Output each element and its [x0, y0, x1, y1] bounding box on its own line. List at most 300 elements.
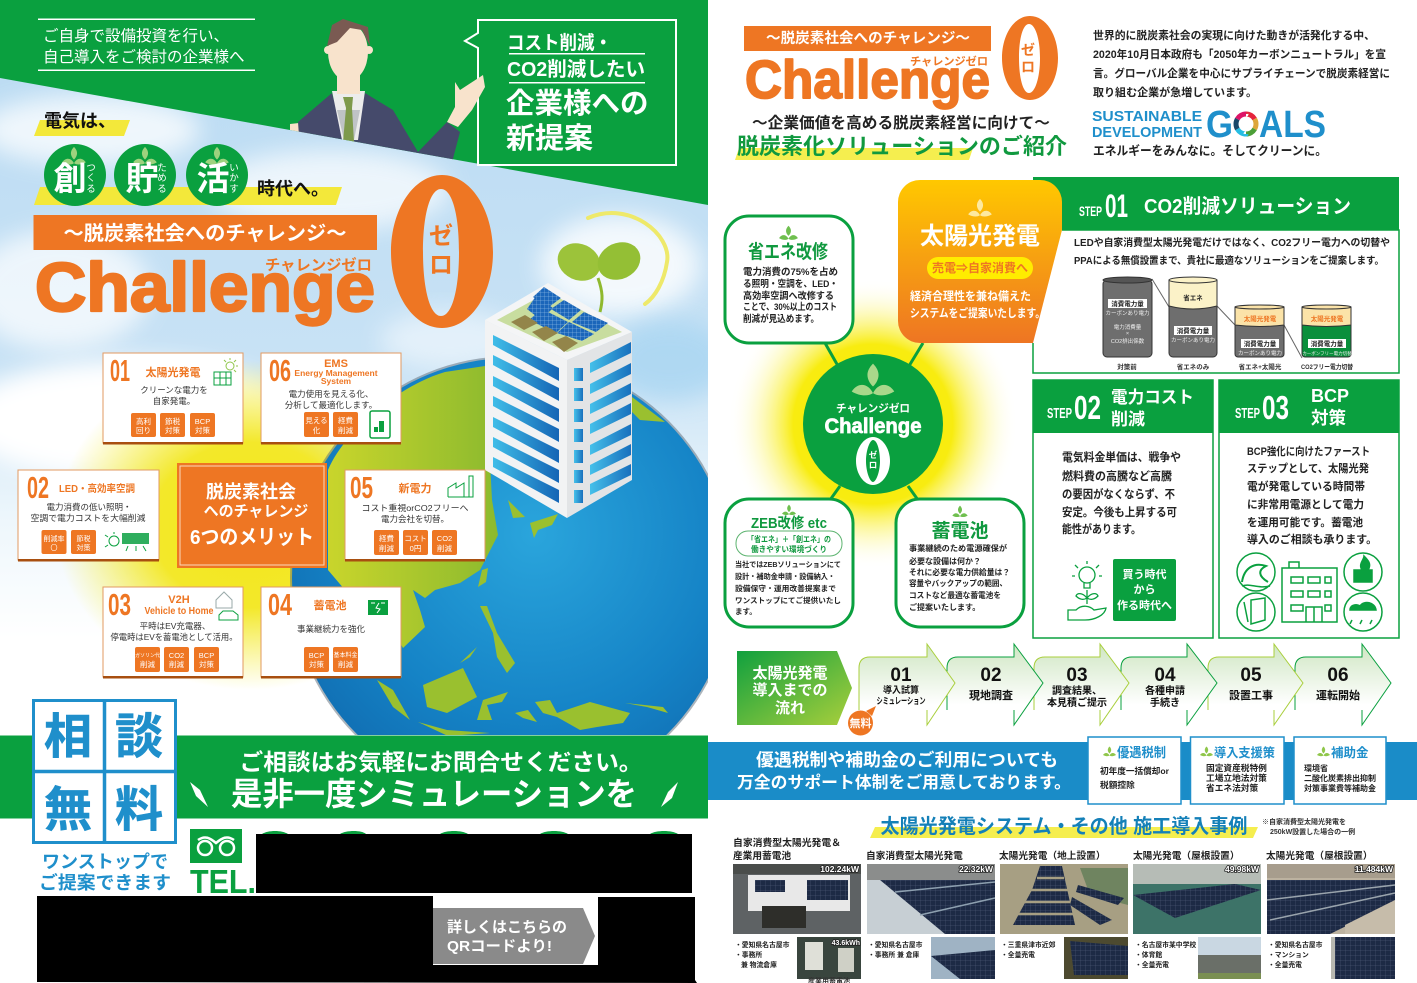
chart: cylinder comparison: 対策前 [1117, 362, 1137, 371]
right page intro paragraph [1093, 28, 1390, 99]
circle: 貯: め [157, 173, 167, 184]
chart: cylinder comparison: 消費電力量 [1244, 339, 1277, 348]
box: 補助金: 環境省 [1304, 763, 1328, 773]
case 3 [999, 849, 1128, 979]
box: 優遇税制 [1088, 737, 1181, 804]
chart: cylinder comparison: 省エネのみ [1177, 362, 1210, 371]
case 2: 自家消費型太陽光発電 [866, 849, 963, 862]
step 01 panel: LEDや自家消費型太陽光発電だけではなく、CO2フリー電力への切替や [1074, 236, 1390, 249]
circle: 活: い [229, 163, 239, 174]
case 1: ・愛知県名古屋市 [735, 940, 790, 949]
merit card 06: 分析して最適化します。 [285, 400, 377, 410]
left page sky background [0, 78, 708, 582]
lower redaction block [37, 896, 697, 983]
big zero [391, 175, 493, 328]
flow step 06: 運転開始 [1316, 688, 1360, 702]
TEL label: TEL. [190, 863, 256, 900]
central circle: Challenge 0: ゼ [869, 450, 878, 460]
central circle: Challenge 0: ロ [869, 460, 877, 470]
flow step 03 [1034, 644, 1129, 725]
yellow band and time text [34, 179, 342, 205]
flow step 04: 04 [1154, 665, 1176, 686]
blue support band: 万全のサポート体制をご用意しております。 [737, 772, 1071, 792]
step 03 panel: 03 [1262, 389, 1289, 426]
chart: cylinder comparison: 太陽光発電 [1244, 314, 1277, 323]
SDGs logo: G [1206, 104, 1233, 146]
box: 補助金 [1294, 737, 1386, 804]
circle: 活: か [229, 173, 239, 184]
merit card 01: 高利 [136, 416, 151, 426]
chart: cylinder comparison: 電力消費量 [1114, 323, 1142, 331]
QR arrow callout: QRコードより! [447, 938, 552, 955]
merit card 01: 太陽光発電 [146, 365, 200, 379]
card: ZEB改修: ワンストップにてご提供いたし [735, 595, 841, 605]
step 02 panel: 買う時代 [1122, 567, 1166, 581]
merit center box [177, 463, 327, 568]
flow step 01: シミュレーション [876, 696, 926, 706]
card: 蓄電池: それに必要な電力供給量は？ [909, 567, 1010, 577]
QR arrow callout: 詳しくはこちらの [447, 919, 567, 936]
connecting lines [825, 343, 923, 500]
building with rooftop solar [485, 283, 632, 518]
headline: 電気は: 電気は、 [44, 110, 116, 131]
merit card 05: CO2 [437, 534, 452, 543]
merit card 06: Energy Management [294, 368, 378, 378]
icon: bulb and hand [1068, 561, 1106, 620]
merit card 06 [261, 353, 401, 444]
circle: 創: 創 [54, 160, 86, 197]
green consultation band: 是非一度シミュレーションを [231, 776, 637, 812]
box: 導入支援策 [1190, 737, 1284, 804]
merit card 02: 節税 [76, 534, 90, 543]
cases note: ※自家消費型太陽光発電を [1262, 817, 1346, 826]
headline: 電気は [34, 110, 130, 136]
chart: cylinder comparison: × [1126, 331, 1129, 337]
merit card 05: 新電力 [398, 481, 432, 495]
green consultation band [0, 736, 708, 818]
merit card 02: 電力消費の低い照明・ [46, 502, 132, 512]
speech bubble: CO2削減したい [507, 57, 645, 81]
merit card 01: 回り [136, 426, 151, 435]
flow step 05 [1208, 644, 1303, 725]
merit card 05: 0円 [410, 544, 421, 553]
box: 優遇税制: 初年度一括償却or [1100, 765, 1170, 776]
chart: cylinder comparison: 省エネ+太陽光 [1239, 362, 1282, 371]
circle: 貯 [114, 144, 176, 206]
merit card 05: 経費 [379, 533, 394, 543]
card: 蓄電池: 蓄電池 [931, 520, 989, 542]
card: ZEB改修: ZEB改修 etc [751, 514, 827, 532]
card: 蓄電池: 必要な設備は何か？ [909, 556, 981, 566]
right page Challenge logotype: Challenge [745, 50, 990, 110]
case 4: ・全量売電 [1135, 960, 1169, 969]
merit card 05 [345, 470, 485, 562]
blue support band: 優遇税制や補助金のご利用についても [756, 749, 1058, 770]
chart: cylinder comparison: 省エネ [1183, 293, 1203, 302]
case 5: ・愛知県名古屋市 [1268, 940, 1323, 949]
merit card 03: V2H [168, 594, 190, 606]
card: 蓄電池: 容量やバックアップの範囲、 [909, 578, 1007, 588]
orange banner [34, 215, 377, 250]
card: 蓄電池: ご提案いたします。 [909, 602, 980, 612]
step 02 panel: 燃料費の高騰など高騰 [1062, 469, 1172, 483]
merit card 06: 削減 [338, 425, 353, 435]
merit card 04: 蓄電池 [314, 598, 346, 612]
chart: cylinder comparison: 消費電力量 [1311, 339, 1344, 348]
box: 補助金: 対策事業費等補助金 [1304, 783, 1376, 793]
right page main heading: 脱炭素化ソリューションのご紹介 [737, 134, 1067, 159]
chart: cylinder comparison: カーボンフリー電力切替 [1302, 350, 1352, 357]
merit card 03: 対策 [199, 659, 214, 669]
box: 補助金: 補助金 [1331, 745, 1369, 760]
SDGs logo: DEVELOPMENT [1092, 124, 1202, 141]
phone number redaction [256, 831, 692, 893]
SDGs logo: ALS [1259, 104, 1326, 146]
flow step 01: 01 [890, 665, 912, 686]
case 1: 102.24kW [820, 864, 860, 874]
case 1 [733, 836, 861, 983]
cases note [1262, 817, 1355, 836]
step 02 panel: 電力コスト [1111, 388, 1194, 407]
card: ZEB改修: 働きやすい環境づくり [751, 544, 827, 554]
QR arrow callout [433, 896, 598, 965]
right page subtitle: ～企業価値を高める脱炭素経営に向けて～ [752, 113, 1050, 132]
merit card 04: 04 [268, 587, 293, 622]
Challenge logotype: Challenge [35, 249, 375, 326]
merit card 02: 〇 [50, 544, 58, 552]
merit card 03: 03 [108, 587, 131, 622]
card: 太陽光発電: システムをご提案いたします。 [910, 306, 1045, 320]
merit card 03 [103, 587, 243, 678]
businessman illustration [290, 19, 460, 170]
merit card 03: 削減 [140, 659, 155, 669]
card: 太陽光発電: 太陽光発電 [920, 223, 1040, 250]
chart: cylinder comparison: 太陽光発電 [1311, 314, 1344, 323]
case 4: 49.98kW [1225, 864, 1260, 874]
right page intro paragraph: 言。グローバル企業を中心にサプライチェーンで脱炭素経営に [1093, 66, 1390, 80]
step 02 panel: から [1134, 583, 1156, 596]
chart: cylinder comparison: カーボンあり電力 [1105, 309, 1150, 317]
green consultation band: ご相談はお気軽にお問合せください。 [240, 749, 642, 775]
merit card 02: 削減率 [44, 534, 64, 543]
step 03 panel: を運用可能です。蓄電池 [1247, 515, 1363, 529]
相談無料 badge [33, 700, 176, 843]
free badge [848, 706, 876, 736]
merit card 01: 対策 [195, 425, 210, 435]
circle: 貯: る [157, 184, 167, 195]
big zero: ロ [429, 252, 453, 279]
相談無料 badge: 無 [44, 784, 92, 837]
相談無料 badge: 相 [44, 711, 92, 764]
intro text with rules: 自己導入をご検討の企業様へ [43, 48, 245, 66]
card: 太陽光発電 [898, 177, 1399, 343]
step 03 panel: 導入のご相談も承ります。 [1247, 532, 1377, 546]
card: 省エネ改修: 削減が見込めます。 [743, 313, 819, 325]
central yellow glow [728, 279, 1018, 569]
card: 太陽光発電: 経済合理性を兼ね備えた [910, 289, 1031, 303]
right page intro paragraph: 世界的に脱炭素社会の実現に向けた動きが活発化する中、 [1093, 28, 1375, 42]
merit card 04: 事業継続力を強化 [297, 624, 365, 634]
flow step 03: 03 [1066, 665, 1088, 686]
merit card 03: 平時はEV充電器、 [140, 621, 210, 631]
cases note: 250kW設置した場合の一例 [1270, 827, 1355, 836]
step 02 panel: STEP [1047, 405, 1072, 422]
Challenge logotype: チャレンジゼロ [265, 256, 372, 274]
step 02 panel: 電気料金単価は、戦争や [1062, 450, 1181, 464]
circle: 貯: た [157, 163, 167, 174]
chart: cylinder comparison: CO2排出係数 [1111, 337, 1145, 345]
box: 導入支援策: 省エネ法対策 [1206, 782, 1258, 793]
card: ZEB改修: ます。 [735, 607, 757, 616]
circle: 創: る [86, 184, 96, 195]
flow step 03: 本見積ご提示 [1047, 696, 1107, 709]
step 01 panel: 01 [1105, 188, 1128, 224]
flow label: 導入までの流れ: 流れ [775, 700, 805, 717]
case 1: 自家消費型太陽光発電＆ [733, 836, 841, 849]
circle: 創: つ [86, 163, 96, 174]
card: 蓄電池: コストなど最適な蓄電池を [909, 590, 1001, 600]
card: ZEB改修: 設計・補助金申請・設備納入・ [735, 571, 835, 581]
step 02 panel: 削減 [1111, 410, 1145, 429]
box: 導入支援策: 固定資産税特例 [1206, 762, 1267, 773]
merit card 03: 削減 [169, 659, 184, 669]
chart: cylinder comparison: 消費電力量 [1177, 326, 1210, 335]
merit card 01: 自家発電。 [153, 396, 195, 406]
step 02 panel: 02 [1074, 389, 1101, 426]
icon: disaster circles and office building [1237, 553, 1382, 631]
card: ZEB改修: 「省エネ」＋「創エネ」の [747, 534, 831, 544]
SDGs caption: エネルギーをみんなに。そしてクリーンに。 [1093, 144, 1327, 158]
flow label: 導入までの流れ: 太陽光発電 [752, 664, 828, 682]
big zero: ゼ [429, 222, 453, 250]
right page zero: ロ [1021, 59, 1035, 75]
step 03 panel: BCP [1311, 386, 1349, 406]
merit card 02: 空調で電力コストを大幅削減 [30, 513, 146, 523]
card: ZEB改修: 当社ではZEBソリューションにて [735, 559, 841, 569]
merit card 04: 基本料金 [333, 651, 358, 659]
case 2: 22.32kW [959, 864, 994, 874]
chart: cylinder comparison: CO2フリー電力切替 [1301, 362, 1353, 371]
central circle: Challenge 0: Challenge [824, 415, 922, 438]
相談無料 badge: 談 [115, 711, 163, 764]
card: 省エネ改修: る照明・空調を、LED・ [743, 278, 838, 290]
case 4: ・名古屋市某中学校 [1135, 940, 1196, 949]
case 5 [1266, 849, 1395, 979]
right page header banner: ～脱炭素社会へのチャレンジ～ [766, 29, 970, 47]
merit card 06: 06 [269, 353, 291, 388]
card: 省エネ改修: 高効率空調へ改修する [743, 290, 834, 302]
step 01 panel: STEP [1079, 203, 1102, 219]
merit center box: 6つのメリット [190, 526, 314, 549]
chart: cylinder comparison [1103, 277, 1353, 371]
case 5: ・全量売電 [1268, 960, 1302, 969]
merit card 06: 化 [313, 426, 321, 435]
circle: 貯: 貯 [126, 160, 158, 197]
merit card 04 [261, 587, 401, 678]
case 4: ・体育館 [1135, 950, 1162, 959]
box: 優遇税制: 税額控除 [1100, 779, 1135, 790]
case 5: 太陽光発電（屋根設置） [1266, 849, 1373, 862]
case 1: ・事務所 [735, 950, 762, 959]
circle: 活: 活 [196, 160, 230, 197]
intro text with rules: ご自身で設備投資を行い、 [43, 27, 229, 45]
flow step 03: 調査結果、 [1052, 684, 1102, 697]
merit card 04: BCP [309, 651, 324, 660]
right page Challenge logotype: チャレンジゼロ [910, 54, 988, 68]
card: 省エネ改修: 電力消費の75%を占め [743, 266, 838, 278]
flow step 02 [947, 644, 1043, 725]
flow step 04: 手続き [1150, 696, 1180, 709]
box: 導入支援策: 工場立地法対策 [1206, 772, 1267, 783]
circle: 創 [44, 144, 106, 206]
step 02 panel: の要因がなくならず、不 [1062, 487, 1175, 501]
flow step 02: 02 [980, 665, 1002, 686]
merit card 06: 電力使用を見える化、 [289, 389, 373, 399]
merit card 02 [18, 470, 159, 562]
speech bubble [465, 20, 676, 165]
step 03 panel: 対策 [1311, 408, 1346, 428]
merit card 04: 対策 [309, 659, 324, 669]
right page zero [1002, 16, 1058, 100]
merit card 06: 見える [305, 416, 328, 425]
flow step 02: 現地調査 [969, 688, 1013, 702]
chart: cylinder comparison: カーボンあり電力 [1238, 349, 1282, 357]
step 01 panel: PPAによる無償設置まで、貴社に最適なソリューションをご提案します。 [1074, 254, 1384, 267]
merit card 04: 削減 [338, 659, 353, 669]
merit card 02: 02 [27, 470, 49, 505]
merit card 06: 経費 [338, 415, 353, 425]
merit card 02: 対策 [76, 543, 90, 552]
right page header banner [744, 26, 991, 51]
merit card 03: 停電時はEVを蓄電池として活用。 [110, 632, 238, 642]
merit card 06: System [321, 376, 352, 386]
merit card 05: コスト重視orCO2フリーへ [362, 503, 469, 513]
SDGs logo [1092, 104, 1326, 146]
one stop caption: ご提案できます [39, 872, 171, 893]
card: ZEB改修: 設備保守・運用改善提案まで [735, 583, 837, 593]
case 2 [866, 849, 995, 979]
sprout and sun arc [551, 213, 667, 312]
merit card 06: EMS [324, 358, 348, 370]
box: 導入支援策: 導入支援策 [1214, 745, 1275, 760]
circle: 活: す [229, 184, 239, 195]
case 1: 産業用蓄電池 [733, 849, 791, 862]
speech bubble: 新提案 [506, 122, 593, 155]
case 2: ・愛知県名古屋市 [868, 940, 923, 949]
central circle: Challenge 0: チャレンジゼロ [836, 401, 910, 415]
merit card 01: BCP [195, 417, 210, 426]
SDGs logo: SUSTAINABLE [1092, 108, 1202, 125]
merit card 03: BCP [199, 651, 214, 660]
card: ZEB改修 [725, 499, 853, 627]
case 3: 太陽光発電（地上設置） [999, 849, 1106, 862]
case 3: ・三重県津市近郊 [1001, 940, 1056, 949]
flow step 05: 05 [1240, 665, 1262, 686]
circle: 創: く [86, 173, 96, 184]
cases heading: 太陽光発電システム・その他 施工導入事例 [880, 814, 1248, 838]
step 03 panel: ステップとして、太陽光発 [1247, 461, 1369, 475]
card: 太陽光発電: 売電⇒自家消費へ [932, 260, 1028, 275]
step 02 panel [1033, 380, 1213, 638]
speech bubble: 企業様への [506, 88, 649, 120]
case 3: ・全量売電 [1001, 950, 1035, 959]
merit card 01: 01 [110, 353, 130, 388]
right page intro paragraph: 2020年10月日本政府も「2050年カーボンニュートラル」を宣 [1093, 47, 1386, 61]
chart: cylinder comparison: カーボンあり電力 [1171, 336, 1215, 344]
case 2: ・事務所 兼 倉庫 [868, 950, 920, 959]
chart: cylinder comparison: 消費電力量 [1111, 299, 1144, 308]
merit card 02: LED・高効率空調 [59, 482, 135, 495]
case 5: 11.484kW [1355, 864, 1394, 874]
flow label: 導入までの流れ [737, 651, 852, 725]
box: 優遇税制: 優遇税制 [1117, 745, 1166, 760]
globe with continents [290, 358, 708, 735]
case 4: 太陽光発電（屋根設置） [1133, 849, 1240, 862]
merit card 05: 削減 [437, 543, 452, 553]
step 02 panel: 安定。今後も上昇する可 [1062, 505, 1177, 519]
merit center box: 脱炭素社会 [206, 482, 296, 502]
case 4 [1133, 849, 1261, 979]
card: 省エネ改修 [725, 216, 853, 343]
merit card 01 [103, 353, 243, 444]
right page intro paragraph: 取り組む企業が急増しています。 [1093, 85, 1257, 99]
freedial icon [190, 829, 242, 863]
flow label: 導入までの流れ: 導入までの [752, 681, 828, 699]
step 03 panel: に非常用電源として電力 [1247, 497, 1364, 511]
merit card 01: クリーンな電力を [140, 385, 208, 395]
speech bubble: コスト削減・ [507, 31, 612, 54]
intro text with rules [38, 18, 255, 71]
card: 省エネ改修: ことで、30%以上のコスト [743, 301, 837, 313]
step 03 panel: 電が発電している時間帯 [1247, 479, 1365, 493]
flow step 06: 06 [1327, 665, 1349, 686]
step 01 panel: CO2削減ソリューション [1144, 194, 1351, 218]
flow step 06 [1295, 644, 1391, 725]
merit center box: へのチャレンジ [204, 503, 308, 520]
step 02 panel: 能性があります。 [1062, 522, 1141, 536]
blue support band [708, 742, 1417, 800]
card: 蓄電池 [896, 499, 1024, 627]
merit card 01: 対策 [165, 425, 180, 435]
merit card 03: CO2 [169, 651, 184, 660]
merit card 03: Vehicle to Home [144, 605, 214, 617]
case 1: 兼 物流倉庫 [741, 960, 777, 969]
相談無料 badge: 料 [115, 784, 163, 837]
merit card 05: 電力会社を切替。 [381, 514, 449, 524]
case 5: ・マンション [1268, 951, 1309, 959]
step 02 panel: 作る時代へ [1117, 598, 1172, 612]
merit card 03: ガソリン代 [135, 652, 160, 659]
businessman raised hand [447, 75, 485, 127]
central circle: Challenge 0 [803, 354, 943, 494]
flow step 04: 各種申請 [1145, 684, 1185, 697]
merit card 05: 削減 [379, 543, 394, 553]
right page zero: ゼ [1021, 42, 1035, 58]
circle: 活 [186, 144, 248, 206]
flow step 01 [859, 644, 955, 725]
card: 蓄電池: 事業継続のため電源確保が [909, 543, 1007, 553]
card: 省エネ改修: 省エネ改修 [748, 241, 828, 263]
step 01 panel [1033, 188, 1399, 373]
box: 補助金: 二酸化炭素排出抑制 [1304, 773, 1376, 783]
step 03 panel [1219, 380, 1399, 638]
merit card 01: 節税 [165, 416, 180, 426]
flow step 05: 設置工事 [1229, 688, 1273, 702]
flow step 01: 導入試算 [883, 684, 919, 695]
merit card 05: コスト [404, 534, 427, 543]
top green diagonal panel [0, 0, 708, 205]
yellow glow behind merits [55, 360, 445, 690]
